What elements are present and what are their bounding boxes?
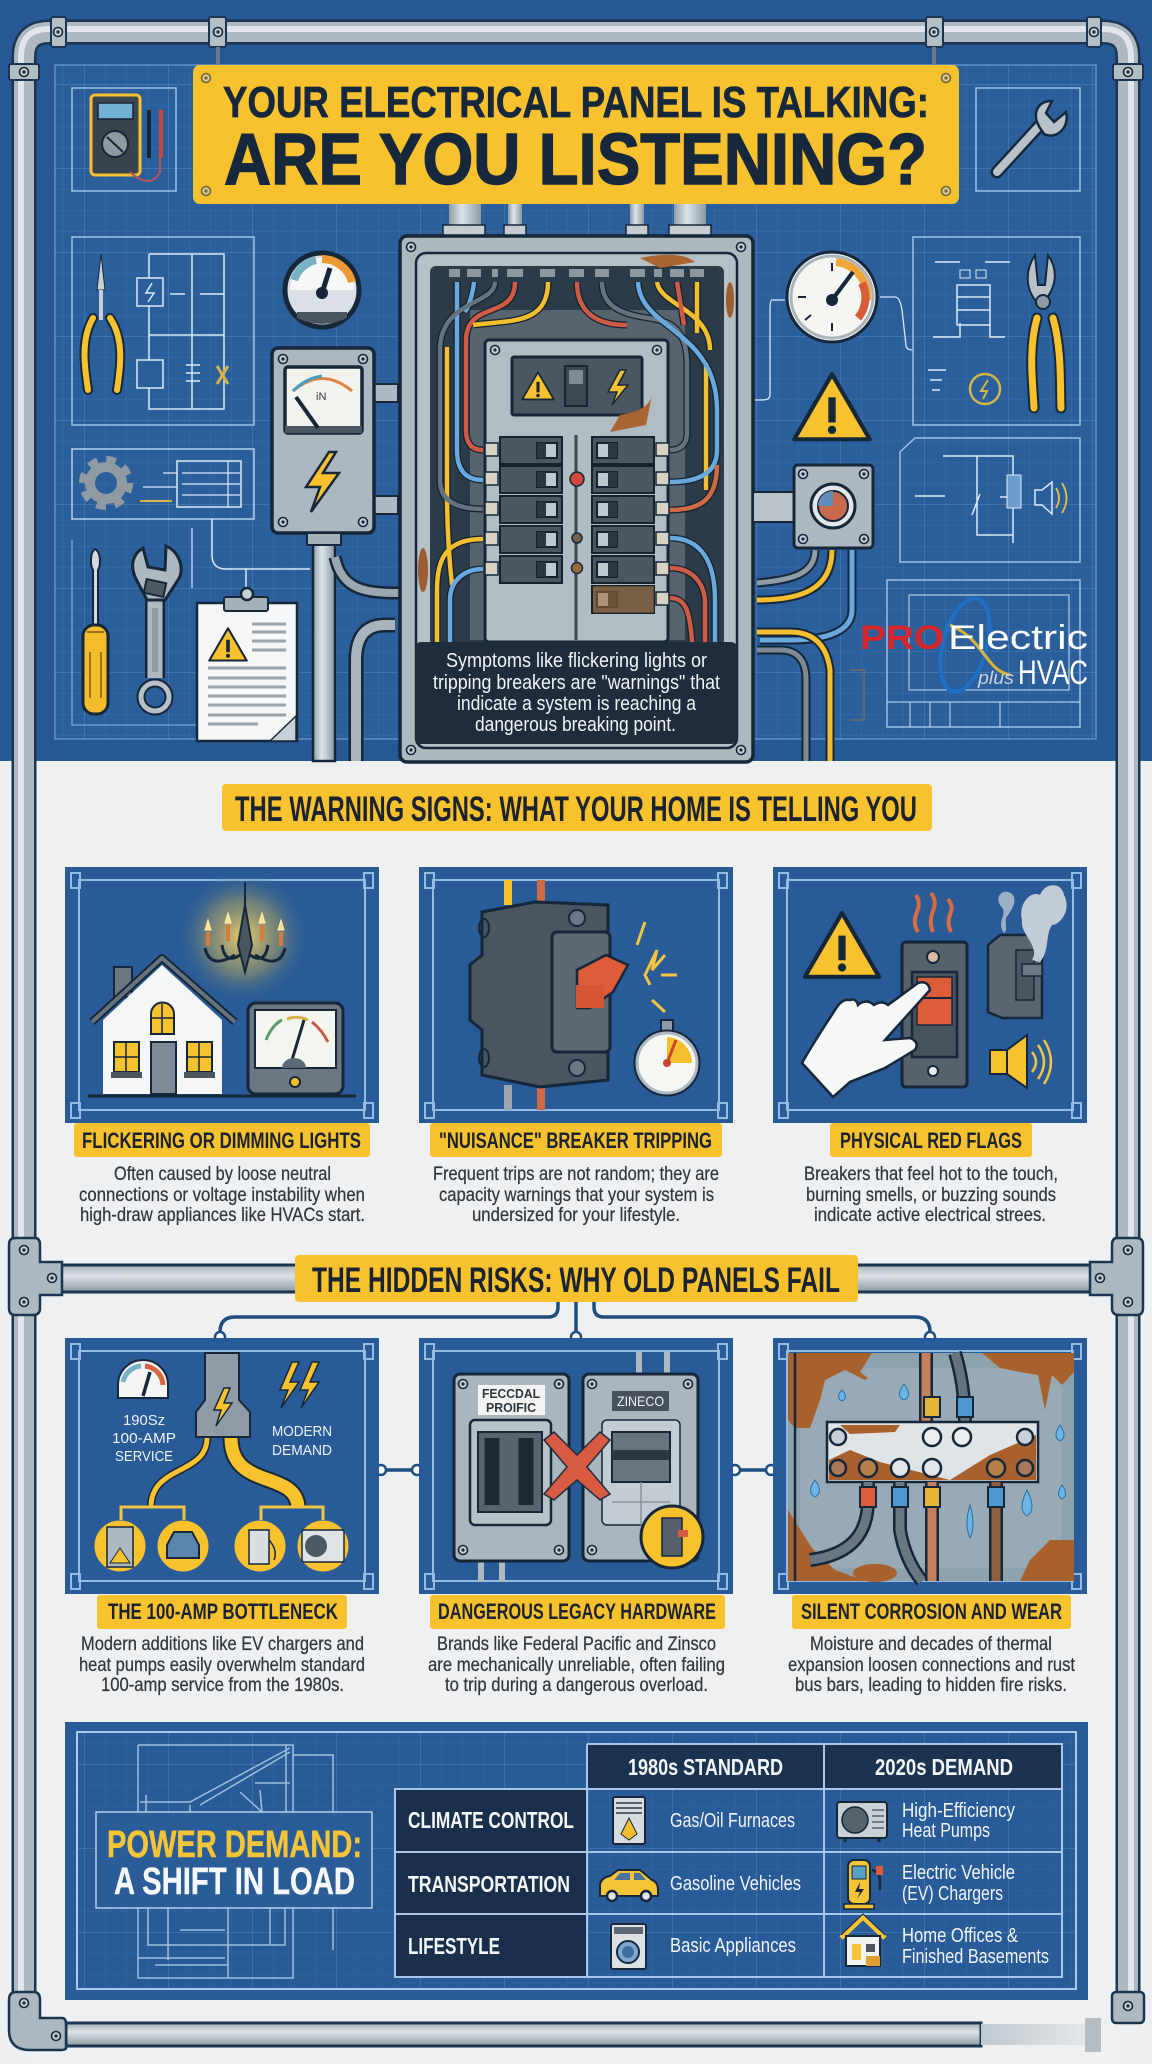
icon: washing machine [611, 1924, 646, 1969]
icon: warning triangle right [794, 374, 870, 439]
card: flickering or dimming lights [65, 867, 379, 1226]
body text: to trip during a dangerous overload. [445, 1674, 708, 1696]
main electrical panel [400, 236, 753, 762]
table: 1980s vs 2020s: Home Offices & [902, 1925, 1019, 1947]
icon: large gauge [755, 252, 913, 400]
table: 1980s vs 2020s: Electric Vehicle [902, 1862, 1015, 1884]
illustration: service funnel and loads: SERVICE [115, 1448, 173, 1465]
label [430, 1123, 722, 1157]
body text: Brands like Federal Pacific and Zinsco [437, 1633, 716, 1655]
logo: PRO Electric plus HVAC [860, 593, 1088, 697]
logo: PRO Electric plus HVAC: plus [977, 668, 1014, 688]
table: 1980s vs 2020s: CLIMATE CONTROL [408, 1807, 574, 1833]
breaker sub-panel [485, 340, 668, 642]
caption box: Symptoms like flickering lights or [446, 650, 707, 672]
title banner [193, 65, 959, 204]
body text: are mechanically unreliable, often failing [428, 1654, 725, 1676]
table: 1980s vs 2020s: LIFESTYLE [408, 1933, 500, 1959]
table: 1980s vs 2020s: TRANSPORTATION [408, 1871, 570, 1897]
table: 1980s vs 2020s: Heat Pumps [902, 1820, 990, 1842]
table: 1980s vs 2020s: (EV) Chargers [902, 1883, 1003, 1905]
table: 1980s vs 2020s: Basic Appliances [670, 1935, 796, 1957]
icon: multimeter [72, 88, 176, 191]
label [74, 1123, 370, 1157]
panel: blueprint box behind logo [887, 580, 1080, 727]
icon: wrench top right [976, 88, 1080, 191]
illustration: legacy panels crossed out [454, 1352, 703, 1582]
body text: expansion loosen connections and rust [788, 1654, 1075, 1676]
label: PHYSICAL RED FLAGS [840, 1128, 1022, 1153]
body text: capacity warnings that your system is [439, 1184, 714, 1206]
illustration: legacy panels crossed out: FECCDAL [482, 1386, 540, 1401]
label [792, 1595, 1071, 1629]
panel: right circuit with speaker [900, 438, 1080, 562]
body text: Breakers that feel hot to the touch, [804, 1163, 1058, 1185]
icon: small gauge [285, 253, 359, 327]
table: 1980s vs 2020s: High-Efficiency [902, 1800, 1015, 1822]
body text [79, 1633, 365, 1696]
table: 1980s vs 2020s [395, 1744, 1062, 1977]
body text [79, 1163, 365, 1226]
label: SILENT CORROSION AND WEAR [801, 1599, 1062, 1624]
panel: gear schematic [72, 449, 310, 737]
panel: white lower area [37, 761, 1115, 2064]
illustration: service funnel and loads [96, 1353, 347, 1570]
panel: power demand comparison [65, 1722, 1088, 2000]
label [430, 1595, 725, 1629]
panel: right schematic with pliers [913, 237, 1080, 425]
body text [428, 1633, 725, 1696]
body text: undersized for your lifestyle. [472, 1204, 680, 1226]
body text: Often caused by loose neutral [114, 1163, 331, 1185]
label [97, 1595, 347, 1629]
logo: PRO Electric plus HVAC: Electric [948, 619, 1088, 657]
caption box: dangerous breaking point. [475, 714, 676, 736]
illustration: house, chandelier and meter [88, 869, 356, 1096]
card: dangerous legacy hardware [419, 1338, 733, 1696]
body text: high-draw appliances like HVACs start. [80, 1204, 365, 1226]
body text: Modern additions like EV chargers and [81, 1633, 364, 1655]
body text [788, 1633, 1075, 1696]
body text: heat pumps easily overwhelm standard [79, 1654, 365, 1676]
icon: adjustable wrench [133, 546, 181, 711]
icon: voltage meter box with lightning: iN [316, 391, 326, 403]
icon: heat pump [837, 1802, 887, 1842]
body text: 100-amp service from the 1980s. [101, 1674, 344, 1696]
label [830, 1123, 1032, 1157]
card: 100-amp bottleneck [65, 1338, 379, 1696]
body text: Moisture and decades of thermal [810, 1633, 1052, 1655]
label: FLICKERING OR DIMMING LIGHTS [82, 1128, 361, 1153]
illustration: legacy panels crossed out: ZINECO [617, 1393, 664, 1409]
illustration: service funnel and loads: MODERN [272, 1423, 332, 1440]
icon: screwdriver [83, 549, 108, 714]
body text [804, 1163, 1058, 1226]
illustration: service funnel and loads: 100-AMP [112, 1430, 176, 1447]
illustration: legacy panels crossed out: PROIFIC [486, 1400, 537, 1415]
table: 1980s vs 2020s: Gas/Oil Furnaces [670, 1810, 795, 1832]
label: THE 100-AMP BOTTLENECK [108, 1599, 338, 1624]
body text: Frequent trips are not random; they are [433, 1163, 719, 1185]
heading: hidden risks [295, 1255, 858, 1302]
label: "NUISANCE" BREAKER TRIPPING [439, 1128, 712, 1153]
icon: control box with dial and cables [753, 465, 873, 761]
connectors from hidden risks heading to cards [215, 1300, 935, 1475]
title block: power demand: POWER DEMAND: [107, 1824, 362, 1866]
title banner: YOUR ELECTRICAL PANEL IS TALKING: [223, 78, 929, 127]
body text: bus bars, leading to hidden fire risks. [795, 1674, 1067, 1696]
logo: PRO Electric plus HVAC: PRO [860, 619, 944, 657]
heading: hidden risks: THE HIDDEN RISKS: WHY OLD PANELS FAIL [312, 1261, 840, 1300]
icon: home office house [841, 1914, 885, 1966]
caption box [415, 642, 737, 744]
card: silent corrosion and wear [773, 1338, 1087, 1696]
icon: gasoline car [600, 1870, 658, 1901]
body text [433, 1163, 719, 1226]
icon: EV charger [844, 1860, 883, 1909]
icon: furnace [613, 1797, 645, 1844]
body text: burning smells, or buzzing sounds [806, 1184, 1056, 1206]
title block: power demand [96, 1812, 372, 1908]
wires [437, 282, 717, 642]
table: 1980s vs 2020s: Finished Basements [902, 1946, 1049, 1968]
table: 1980s vs 2020s: 1980s STANDARD [628, 1754, 783, 1780]
body text: connections or voltage instability when [79, 1184, 365, 1206]
caption box: indicate a system is reaching a [457, 693, 697, 715]
body text: indicate active electrical strees. [814, 1204, 1046, 1226]
caption box: tripping breakers are "warnings" that [433, 672, 720, 694]
label: DANGEROUS LEGACY HARDWARE [438, 1599, 716, 1624]
logo: PRO Electric plus HVAC: HVAC [1018, 654, 1088, 692]
panel: blueprint header background [0, 0, 1152, 761]
icon: conduit stems above the panel [443, 204, 711, 237]
illustration: breaker and stopwatch [470, 880, 699, 1110]
panel: left schematic with pliers [72, 237, 254, 425]
pipe frame: middle T-junction and bottom run [9, 1238, 1144, 2052]
heading: warning signs [222, 784, 932, 831]
title block: power demand: A SHIFT IN LOAD [114, 1861, 355, 1903]
table: 1980s vs 2020s: Gasoline Vehicles [670, 1873, 801, 1895]
table: 1980s vs 2020s: 2020s DEMAND [875, 1754, 1013, 1780]
icon: clipboard with warning [197, 588, 297, 741]
illustration: corroded bus bar [788, 1353, 1074, 1582]
card: nuisance breaker tripping [419, 867, 733, 1226]
illustration: service funnel and loads: DEMAND [272, 1442, 332, 1459]
icon: voltage meter box with lightning [272, 348, 400, 761]
illustration: hand, switch, smoke, speaker [802, 885, 1067, 1097]
card: physical red flags [773, 867, 1087, 1226]
illustration: service funnel and loads: 190Sz [123, 1412, 165, 1429]
title banner: ARE YOU LISTENING? [224, 120, 927, 200]
sketch: house blueprint [138, 1745, 333, 1978]
